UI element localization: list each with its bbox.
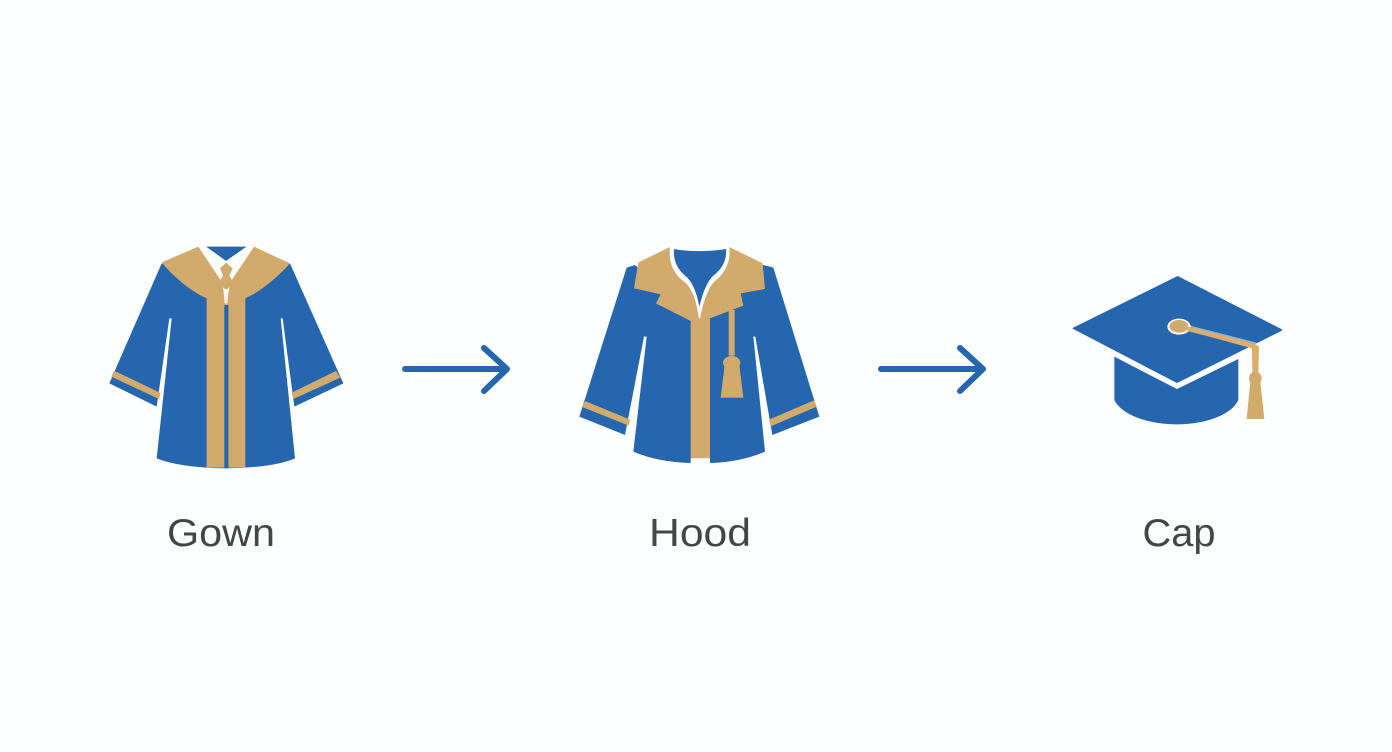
label: hood: Hood: [649, 512, 751, 555]
icon: hood: [579, 247, 819, 464]
label: cap: Cap: [1142, 512, 1216, 555]
icon: cap: [1073, 277, 1282, 424]
icon: gown: [109, 247, 343, 468]
arrow: hood to cap: [881, 348, 983, 391]
label: gown: Gown: [167, 512, 275, 555]
arrow: gown to hood: [405, 348, 507, 391]
